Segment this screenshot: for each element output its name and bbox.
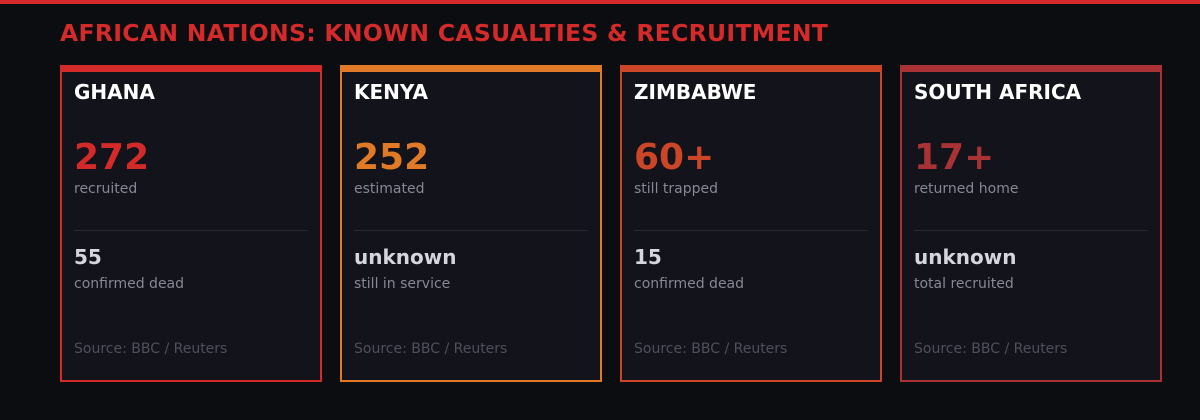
source: Source: BBC / Reuters: [354, 341, 507, 357]
panel: Kenya: [340, 65, 602, 382]
heading: South Africa: SOUTH AFRICA: [914, 80, 1081, 104]
heading: Ghana: GHANA: [74, 80, 155, 104]
panel: Ghana: [60, 65, 322, 382]
big number: 60+: 60+: [634, 137, 714, 178]
stat: unknown: unknown: [914, 245, 1016, 269]
big number: 252: 252: [354, 137, 429, 178]
big number: 272: 272: [74, 137, 149, 178]
label: estimated: estimated: [354, 181, 424, 197]
title: AFRICAN NATIONS: KNOWN CASUALTIES & RECRUITMENT: [60, 19, 828, 47]
stat: 15: 15: [634, 245, 662, 269]
label: recruited: recruited: [74, 181, 137, 197]
label: confirmed dead: confirmed dead: [634, 276, 744, 292]
stat: unknown: unknown: [354, 245, 456, 269]
source: Source: BBC / Reuters: [634, 341, 787, 357]
panel: Zimbabwe: [620, 65, 882, 382]
label: returned home: returned home: [914, 181, 1018, 197]
heading: Zimbabwe: ZIMBABWE: [634, 80, 756, 104]
heading: Kenya: KENYA: [354, 80, 428, 104]
label: total recruited: total recruited: [914, 276, 1014, 292]
label: still trapped: still trapped: [634, 181, 718, 197]
source: Source: BBC / Reuters: [914, 341, 1067, 357]
big number: 17+: 17+: [914, 137, 994, 178]
source: Source: BBC / Reuters: [74, 341, 227, 357]
panel: South Africa: [900, 65, 1162, 382]
label: still in service: still in service: [354, 276, 450, 292]
label: confirmed dead: confirmed dead: [74, 276, 184, 292]
stat: 55: 55: [74, 245, 102, 269]
